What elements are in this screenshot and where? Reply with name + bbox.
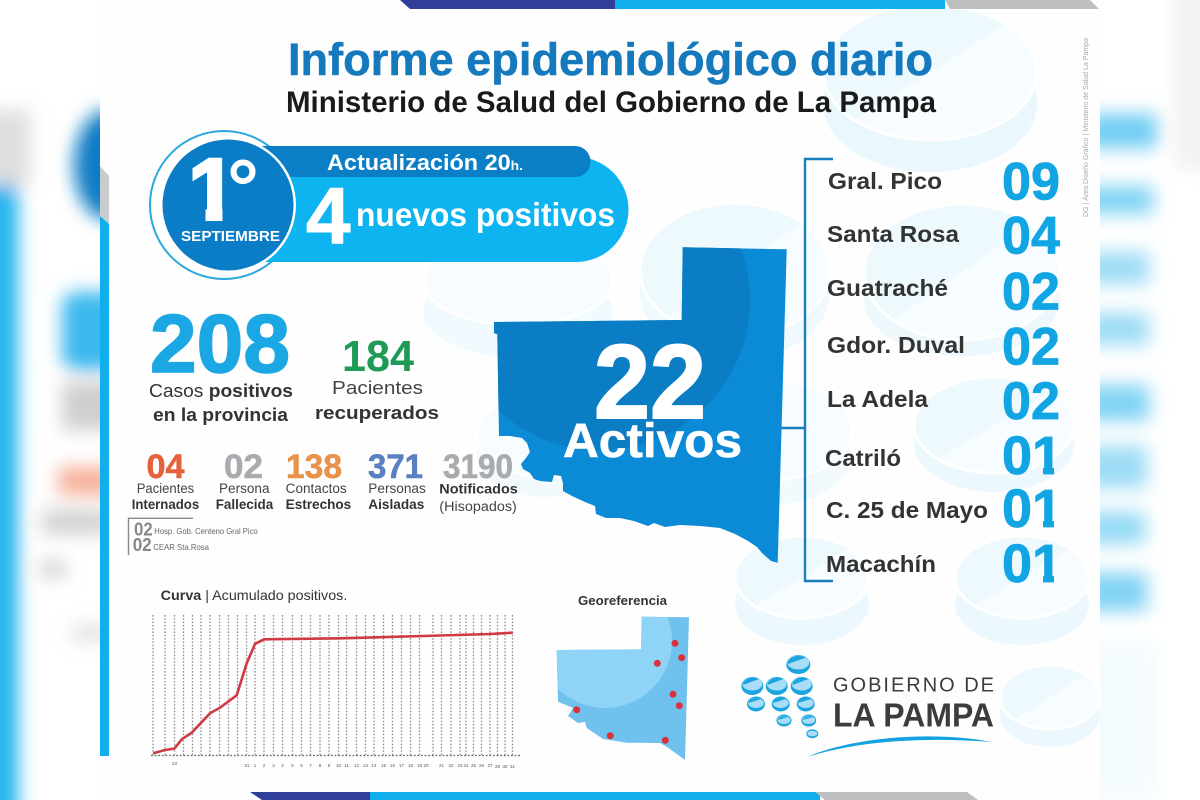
row: Macachín	[828, 544, 1054, 583]
location dots	[573, 640, 685, 744]
title: Informe epidemiológico diario	[288, 34, 933, 85]
stat: close contacts	[286, 448, 351, 512]
date tick labels: 12	[354, 763, 359, 768]
date tick labels: 5	[291, 763, 294, 768]
date tick labels: 3	[272, 763, 275, 768]
large province map	[494, 247, 787, 563]
hospital breakdown	[128, 518, 258, 555]
recovered patients: Pacientes	[332, 378, 423, 398]
row: La Adela	[827, 372, 1060, 431]
row: Gral. Pico: Gral. Pico	[828, 168, 942, 194]
subtitle: Ministerio de Salud del Gobierno de La Pampa	[286, 86, 936, 119]
positive cases total: en la provincia	[153, 405, 289, 425]
date tick labels: 16	[390, 763, 395, 768]
date tick labels: 9	[328, 763, 331, 768]
stat: close contacts: Estrechos	[286, 497, 351, 512]
row: Gral. Pico	[828, 152, 1060, 212]
degree sign: °	[227, 143, 259, 232]
stat: deceased: Fallecida	[216, 497, 274, 512]
row: Santa Rosa	[827, 206, 1061, 266]
new cases number: 4	[306, 171, 351, 260]
curve chart	[151, 615, 520, 769]
date number: 1	[188, 140, 237, 239]
update bar	[262, 146, 590, 177]
date tick labels: 10	[336, 763, 341, 768]
date tick labels: 1	[254, 763, 257, 768]
bottom ribbon	[250, 792, 978, 800]
decorative background pills	[423, 4, 1100, 747]
georeference map	[556, 616, 689, 760]
row: Santa Rosa: 04	[1002, 206, 1061, 266]
credit line: DG | Área Diseño Gráfico | Ministerio de Salud La Pampa	[1081, 38, 1090, 217]
row: Gdor. Duval	[827, 318, 1060, 376]
stat: deceased: Persona	[219, 481, 270, 496]
positive cases total: Casos positivos	[149, 381, 293, 401]
map connector and list bracket	[781, 159, 833, 581]
date tick labels: 18	[408, 763, 413, 768]
row: Macachín: 01	[1002, 534, 1062, 594]
date tick labels: 22	[448, 763, 454, 768]
date tick labels: 25	[471, 763, 476, 768]
positive cases total	[149, 297, 293, 425]
stat: isolated: Aisladas	[368, 497, 424, 512]
row: C. 25 de Mayo	[827, 488, 1054, 528]
date tick labels: 15	[381, 763, 386, 768]
date tick labels: 14	[371, 763, 377, 768]
row: Gral. Pico: 09	[1002, 152, 1060, 212]
active label: Activos	[563, 415, 742, 468]
stat: notified: Notificados	[439, 482, 518, 496]
recovered patients: 184	[342, 332, 415, 381]
hospital breakdown: 02	[134, 520, 153, 540]
row: C. 25 de Mayo: C. 25 de Mayo	[826, 497, 988, 523]
stat: isolated	[368, 448, 426, 512]
row: C. 25 de Mayo: 01	[1002, 479, 1062, 539]
date tick labels: 26	[479, 763, 484, 768]
positive cases total: 208	[150, 297, 290, 390]
date tick labels	[172, 761, 515, 769]
date tick labels: 23	[172, 761, 177, 766]
stat: hospitalized: 04	[146, 448, 185, 486]
stat: close contacts: Contactos	[286, 481, 347, 496]
stat: deceased: 02	[224, 448, 263, 486]
date tick labels: 8	[319, 763, 322, 768]
row: Guatraché	[827, 262, 1060, 322]
recovered patients: recuperados	[315, 403, 439, 423]
date tick labels: 31	[510, 764, 515, 769]
curve line	[153, 633, 513, 753]
date tick labels: 20	[423, 763, 429, 768]
row: Macachín: Macachín	[826, 551, 936, 577]
row: La Adela: La Adela	[827, 386, 928, 412]
hospital breakdown: 02	[133, 535, 152, 555]
stat: notified: 3190	[443, 448, 513, 486]
new positives pill	[262, 157, 628, 262]
row: Guatraché: 02	[1002, 262, 1060, 322]
date tick labels: 21	[439, 763, 444, 768]
left side ribbon	[100, 166, 109, 756]
date tick labels: 19	[417, 763, 422, 768]
new cases label: nuevos positivos	[356, 196, 615, 233]
georeference title: Georeferencia	[578, 593, 668, 608]
date tick labels: 30	[502, 764, 508, 769]
recovered patients	[315, 332, 439, 423]
logo wordmark top: GOBIERNO DE	[833, 675, 994, 697]
locality list	[825, 152, 1062, 594]
date tick labels: 17	[399, 763, 404, 768]
logo swoosh	[807, 736, 992, 757]
date tick labels: 7	[309, 763, 312, 768]
date and new cases banner	[150, 131, 628, 279]
stat: notified: (Hisopados)	[439, 499, 517, 514]
stat: isolated: Personas	[368, 481, 426, 496]
date tick labels: 24	[463, 763, 469, 768]
stat: hospitalized	[132, 448, 199, 512]
logo pills	[741, 655, 818, 738]
hospital breakdown: CEAR Sta.Rosa	[153, 543, 210, 552]
row: Gdor. Duval: Gdor. Duval	[827, 332, 965, 358]
date tick labels: 28	[495, 764, 500, 769]
date tick labels: 31	[244, 763, 250, 768]
date tick labels: 11	[344, 763, 349, 768]
active count: 22	[594, 324, 706, 441]
date tick labels: 13	[363, 763, 368, 768]
hospital breakdown: Hosp. Gob. Centeno Gral Pico	[154, 526, 258, 536]
row: Santa Rosa: Santa Rosa	[827, 221, 959, 247]
stat: isolated: 371	[368, 448, 423, 486]
update time: Actualización 20 h.	[327, 150, 523, 175]
date tick labels: 2	[263, 763, 266, 768]
stat: hospitalized: Internados	[132, 497, 199, 512]
row: Gdor. Duval: 02	[1002, 318, 1060, 376]
stat: deceased	[216, 448, 274, 512]
row: Catriló: 01	[1002, 426, 1062, 486]
date tick labels: 27	[487, 763, 493, 768]
date tick labels: 23	[457, 763, 463, 768]
row: Catriló: Catriló	[825, 445, 901, 471]
stat: hospitalized: Pacientes	[137, 481, 194, 496]
government logo	[741, 655, 994, 757]
date tick labels: 6	[300, 763, 303, 768]
date tick labels: 4	[281, 763, 284, 768]
row: Guatraché: Guatraché	[827, 275, 948, 301]
curve chart title: Curva | Acumulado positivos.	[161, 587, 347, 603]
logo wordmark bottom: LA PAMPA	[833, 698, 994, 735]
stat: notified	[439, 448, 518, 514]
month: SEPTIEMBRE	[181, 228, 280, 245]
row: Catriló	[826, 436, 1054, 475]
row: La Adela: 02	[1002, 372, 1060, 431]
stat: close contacts: 138	[286, 448, 342, 486]
date circle	[162, 140, 294, 270]
top ribbon	[400, 0, 1099, 9]
